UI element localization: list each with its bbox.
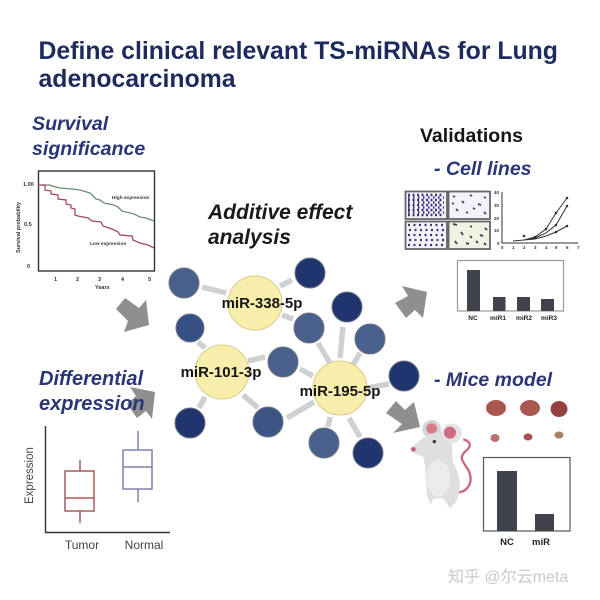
growth line chart: 0 bbox=[501, 245, 504, 250]
miRNA hub nodes bbox=[195, 276, 367, 415]
heading: additive effect analysis: analysis bbox=[208, 226, 291, 249]
network bbox=[169, 258, 419, 468]
box plot bbox=[24, 426, 170, 552]
tail bbox=[457, 439, 471, 493]
axis labels: 1.00 bbox=[23, 182, 34, 188]
right ear bbox=[442, 423, 462, 443]
arrow: to cell lines bbox=[395, 286, 427, 318]
arrow: survival to network bbox=[116, 298, 149, 332]
growth line chart: 7 bbox=[577, 245, 580, 250]
axis labels: 5 bbox=[148, 277, 151, 283]
bar chart: cell lines: miR3 bbox=[541, 315, 557, 322]
growth line chart: 10 bbox=[494, 228, 500, 233]
hub labels: miR-338-5p bbox=[222, 295, 302, 312]
heading: cell lines: - Cell lines bbox=[434, 158, 532, 180]
growth line chart: 0 bbox=[497, 241, 500, 246]
bar chart: cell lines: miR1 bbox=[490, 315, 506, 322]
growth line chart: 4 bbox=[545, 245, 548, 250]
axis labels: Low expression bbox=[90, 241, 126, 247]
heading: survival significance bbox=[32, 113, 145, 160]
arrow: differential expression to network bbox=[127, 387, 155, 419]
growth line chart: 20 bbox=[494, 216, 500, 221]
growth line chart bbox=[494, 190, 580, 250]
bar chart: cell lines: miR2 bbox=[516, 315, 532, 322]
title bbox=[38, 38, 558, 93]
heading: additive effect analysis bbox=[207, 201, 353, 249]
axis labels: 2 bbox=[76, 277, 79, 283]
heading: survival significance: significance bbox=[32, 138, 145, 160]
heading: differential expression: expression bbox=[39, 393, 145, 415]
body and head bbox=[410, 432, 460, 508]
bar chart: mice model: NC bbox=[500, 537, 514, 548]
growth line chart: 1 bbox=[512, 245, 515, 250]
bar chart: mice model bbox=[484, 458, 570, 548]
growth line chart: 2 bbox=[523, 245, 526, 250]
low expression curve bbox=[38, 185, 154, 248]
box plot: Normal bbox=[125, 538, 163, 552]
heading: differential expression bbox=[39, 368, 145, 415]
bar chart: cell lines bbox=[458, 260, 564, 322]
high expression curve bbox=[38, 185, 154, 221]
title: adenocarcinoma bbox=[38, 66, 236, 93]
axis labels: 0.5 bbox=[24, 222, 32, 228]
axis labels: High expression bbox=[112, 195, 149, 201]
axis labels: 3 bbox=[98, 277, 101, 283]
heading: differential expression: Differential bbox=[39, 368, 144, 390]
heading: survival significance: Survival bbox=[32, 113, 109, 135]
title: Define clinical relevant TS-miRNAs for Lung bbox=[38, 38, 558, 65]
axis labels bbox=[16, 182, 151, 291]
axis labels: 0 bbox=[27, 264, 30, 270]
cell migration images bbox=[406, 192, 490, 249]
heading: additive effect analysis: Additive effect bbox=[207, 201, 353, 224]
icon: mouse bbox=[410, 420, 471, 508]
bar chart: cell lines: NC bbox=[468, 315, 478, 322]
growth line chart: 3 bbox=[534, 245, 537, 250]
survival chart bbox=[16, 171, 154, 291]
growth line chart: 5 bbox=[555, 245, 558, 250]
bar chart: mice model: miR bbox=[532, 537, 550, 548]
hub labels: miR-101-3p bbox=[181, 364, 261, 381]
watermark: 知乎 @尔云meta bbox=[448, 568, 568, 586]
normal box bbox=[123, 431, 152, 502]
heading: mice model: - Mice model bbox=[434, 369, 553, 391]
growth line chart: 30 bbox=[494, 203, 500, 208]
box plot: Tumor bbox=[65, 538, 99, 552]
hub labels: miR-195-5p bbox=[300, 383, 380, 400]
tumor samples bbox=[486, 400, 568, 442]
box plot: Expression bbox=[24, 447, 36, 504]
ears bbox=[422, 420, 441, 439]
growth line chart: 40 bbox=[494, 190, 500, 195]
tumor box bbox=[65, 460, 94, 523]
axis labels: Years bbox=[95, 285, 110, 291]
belly bbox=[426, 460, 450, 497]
axis labels: Survival probability bbox=[16, 201, 22, 253]
hub labels bbox=[181, 295, 380, 400]
axis labels: 4 bbox=[121, 277, 125, 283]
outer nodes bbox=[169, 258, 419, 468]
axis labels: 1 bbox=[54, 277, 57, 283]
arrow: to mice model bbox=[386, 401, 420, 433]
heading: validations: Validations bbox=[420, 125, 523, 147]
growth line chart: 6 bbox=[566, 245, 569, 250]
